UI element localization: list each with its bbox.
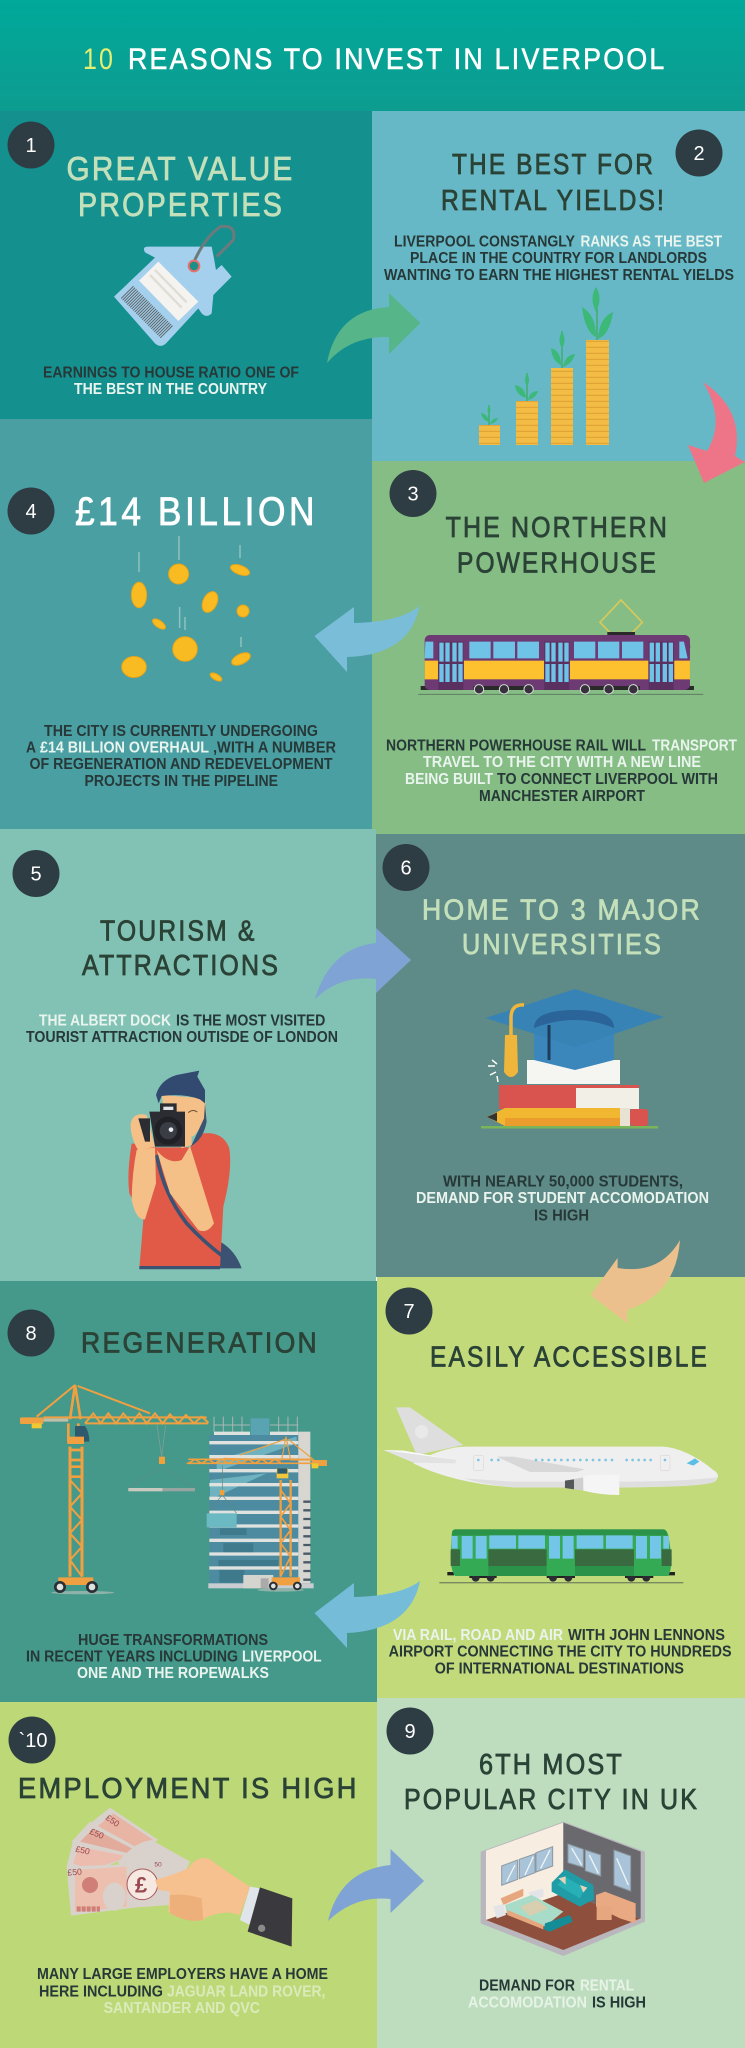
text block 9: DEMAND FOR: [479, 1978, 575, 1995]
number badge 8: [8, 1310, 54, 1356]
text block 3: BEING BUILT: [405, 771, 493, 788]
icon: cranes and building: [20, 1385, 327, 1594]
text block 3: [386, 738, 737, 805]
text block 2: [384, 234, 734, 284]
text block 2: RANKS AS THE BEST: [580, 234, 722, 251]
number badge 7: [386, 1288, 432, 1334]
text block 5: THE ALBERT DOCK: [39, 1013, 172, 1030]
heading: home to 3 major universities: [422, 894, 702, 961]
icon: green train: [439, 1529, 683, 1583]
heading: the best for rental yields: [441, 149, 666, 217]
panel 9: 6th most popular city: [377, 1698, 745, 2048]
icon: hand holding banknotes: £50: [67, 1866, 82, 1878]
text block 4: PROJECTS IN THE PIPELINE: [84, 773, 278, 790]
number badge 1: [8, 122, 54, 168]
heading: tourism and attractions: TOURISM &: [100, 916, 256, 948]
icon: hand holding banknotes: £50: [104, 1812, 122, 1829]
heading: the northern powerhouse: POWERHOUSE: [457, 548, 658, 580]
number badge 9: 9: [404, 1721, 416, 1743]
heading: great value properties: GREAT VALUE: [66, 150, 294, 187]
heading: tourism and attractions: [82, 916, 280, 982]
arrow: 7 to 8: [314, 1581, 420, 1648]
text block 4: ,WITH A NUMBER: [213, 740, 336, 757]
icon: tram: [418, 600, 703, 694]
title: REASONS TO INVEST IN LIVERPOOL: [128, 43, 666, 76]
icon: graduation cap and books: [481, 989, 664, 1128]
text block 10: HERE INCLUDING: [39, 1984, 163, 2001]
text block 10: [37, 1966, 328, 2017]
number badge 7: 7: [403, 1301, 415, 1323]
text block 8: [26, 1632, 322, 1682]
panel 8: regeneration: [0, 1281, 377, 1702]
text block 2: LIVERPOOL CONSTANGLY: [394, 234, 576, 251]
text block 3: TO CONNECT LIVERPOOL WITH: [497, 771, 718, 788]
panel 5: tourism and attractions: [0, 829, 376, 1281]
header banner: [0, 0, 745, 111]
icon: hand holding banknotes: £: [135, 1872, 147, 1897]
text block 10: JAGUAR LAND ROVER,: [167, 1984, 325, 2001]
icon: hand holding banknotes: £50: [88, 1826, 106, 1841]
arrow: 5 to 6: [315, 928, 411, 999]
text block 7: [389, 1627, 732, 1678]
number badge 5: 5: [30, 864, 42, 886]
text block 4: THE CITY IS CURRENTLY UNDERGOING: [44, 723, 318, 740]
heading: great value properties: PROPERTIES: [78, 186, 284, 223]
number badge 4: [8, 488, 54, 534]
panel 6: home to 3 major universities: [376, 834, 745, 1277]
text block 8: ONE AND THE ROPEWALKS: [77, 1665, 269, 1682]
heading: employment is high: EMPLOYMENT IS HIGH: [18, 1773, 359, 1805]
text block 5: IS THE MOST VISITED: [176, 1013, 325, 1030]
heading: regeneration: REGENERATION: [81, 1328, 319, 1360]
panel 1: great value properties: [0, 111, 372, 419]
heading: home to 3 major universities: HOME TO 3 MAJOR: [422, 894, 702, 926]
text block 2: PLACE IN THE COUNTRY FOR LANDLORDS: [410, 250, 707, 267]
text block 9: ACCOMODATION: [468, 1995, 587, 2012]
text block 9: IS HIGH: [592, 1995, 646, 2012]
icon: isometric bedroom: [481, 1822, 645, 1956]
text block 8: LIVERPOOL: [242, 1649, 322, 1666]
number badge 8: 8: [25, 1323, 37, 1345]
arrow: 2 to 3: [688, 382, 745, 483]
icon: hand holding banknotes: 50: [154, 1861, 162, 1868]
text block 10: MANY LARGE EMPLOYERS HAVE A HOME: [37, 1966, 328, 1983]
text block 7: WITH JOHN LENNONS: [568, 1627, 725, 1644]
text block 4: [26, 723, 336, 790]
text block 1: EARNINGS TO HOUSE RATIO ONE OF: [43, 364, 299, 382]
arrow: 3 to 4: [314, 606, 420, 672]
arrow: 1 to 2: [327, 293, 420, 363]
text block 7: OF INTERNATIONAL DESTINATIONS: [435, 1661, 684, 1678]
icon: hand holding banknotes: £50: [75, 1844, 91, 1857]
text block 3: NORTHERN POWERHOUSE RAIL WILL: [386, 738, 646, 755]
heading: great value properties: [66, 150, 294, 223]
text block 7: VIA RAIL, ROAD AND AIR: [393, 1627, 563, 1644]
text block 3: MANCHESTER AIRPORT: [479, 788, 645, 805]
text block 6: WITH NEARLY 50,000 STUDENTS,: [443, 1174, 683, 1191]
icon: falling coins: [122, 536, 252, 683]
heading: the best for rental yields: THE BEST FOR: [452, 149, 655, 181]
heading: the northern powerhouse: THE NORTHERN: [446, 512, 669, 544]
number badge 4: 4: [25, 501, 37, 523]
number badge 5: [12, 850, 60, 897]
text block 9: RENTAL: [580, 1978, 634, 1995]
number badge 3: [390, 470, 436, 517]
panel 7: easily accessible: [377, 1277, 745, 1698]
text block 5: TOURIST ATTRACTION OUTISDE OF LONDON: [26, 1029, 338, 1046]
arrow: 10 to 9: [328, 1849, 424, 1921]
heading: 6th most popular city in uk: POPULAR CITY IN UK: [404, 1784, 699, 1816]
number badge 6: [382, 844, 430, 891]
heading: 14 billion: £14 BILLION: [75, 490, 318, 534]
heading: 6th most popular city in uk: 6TH MOST: [479, 1749, 624, 1781]
panel 2: best for rental yields: [372, 111, 745, 461]
title: 10: [83, 43, 115, 76]
icon: growing coin stacks: [479, 287, 613, 445]
text block 10: SANTANDER AND QVC: [104, 2000, 260, 2017]
text block 4: £14 BILLION OVERHAUL: [40, 740, 209, 757]
heading: the best for rental yields: RENTAL YIELDS!: [441, 185, 666, 217]
heading: 6th most popular city in uk: [404, 1749, 699, 1816]
number badge 1: 1: [25, 135, 37, 157]
number badge 10: `10: [19, 1730, 47, 1752]
heading: tourism and attractions: ATTRACTIONS: [82, 950, 280, 982]
arrow: 6 to 7: [590, 1240, 680, 1323]
text block 1: [43, 364, 299, 398]
number badge 9: [386, 1708, 434, 1754]
heading: the northern powerhouse: [446, 512, 669, 580]
icon: aeroplane: [383, 1407, 718, 1495]
text block 6: IS HIGH: [534, 1208, 589, 1225]
number badge 10: [8, 1716, 56, 1764]
icon: hand holding banknotes: [67, 1808, 292, 1947]
icon: photographer: [128, 1071, 242, 1269]
number badge 2: [676, 130, 722, 176]
number badge 2: 2: [693, 143, 705, 165]
text block 8: HUGE TRANSFORMATIONS: [78, 1632, 268, 1649]
heading: home to 3 major universities: UNIVERSITIES: [462, 929, 663, 961]
text block 4: OF REGENERATION AND REDEVELOPMENT: [30, 756, 333, 773]
text block 1: THE BEST IN THE COUNTRY: [74, 381, 268, 398]
text block 9: [468, 1978, 646, 2012]
panel 4: 14 billion: [0, 419, 372, 829]
text block 5: [26, 1013, 338, 1046]
text block 8: IN RECENT YEARS INCLUDING: [26, 1649, 238, 1666]
text block 6: [416, 1174, 709, 1225]
panel 3: northern powerhouse: [372, 461, 745, 834]
number badge 6: 6: [400, 858, 412, 880]
number badge 3: 3: [407, 484, 419, 506]
icon: house price tag: [114, 226, 234, 346]
text block 3: TRAVEL TO THE CITY WITH A NEW LINE: [423, 754, 701, 771]
panel 10: employment is high: [0, 1702, 377, 2048]
text block 6: DEMAND FOR STUDENT ACCOMODATION: [416, 1190, 709, 1207]
text block 4: A: [26, 740, 36, 757]
